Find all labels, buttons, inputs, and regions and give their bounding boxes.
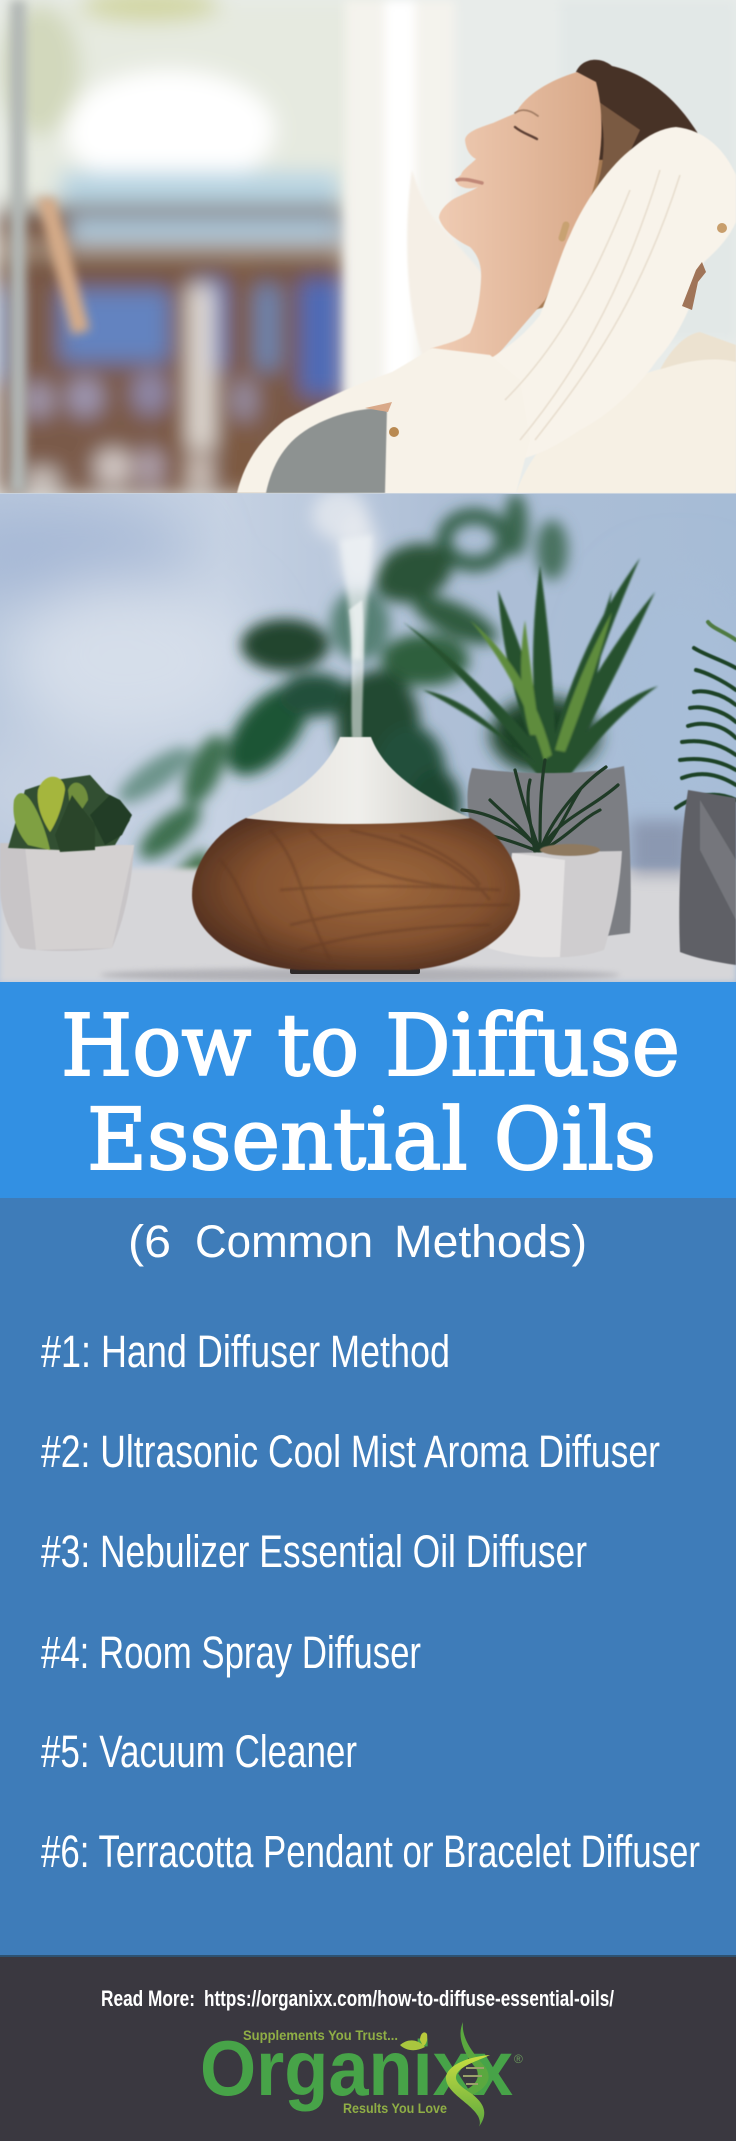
read more link text: https://organixx.com/how-to-diffuse-essential-oils/ (204, 1986, 614, 2011)
method list: #5: Vacuum Cleaner (41, 1726, 357, 1777)
diffuser wood base (192, 818, 520, 970)
small spiky plant (462, 760, 618, 852)
woman: hair (533, 60, 700, 310)
footer (0, 1955, 736, 2141)
left succulent (8, 775, 132, 852)
panel: methods (0, 1198, 736, 1955)
spiky plant behind (403, 558, 658, 782)
method list: #3: Nebulizer Essential Oil Diffuser (41, 1526, 587, 1577)
wood grain (234, 830, 506, 946)
title: How to Diffuse (61, 997, 680, 1096)
title band (0, 982, 736, 1198)
table (0, 820, 736, 982)
woman: face and neck (430, 72, 602, 358)
woman: raised far sleeve (406, 173, 481, 346)
diffuser feet (290, 968, 420, 974)
right plant (676, 622, 736, 808)
mist (312, 489, 378, 738)
seam between photos (0, 490, 736, 496)
title (61, 997, 680, 1190)
diffuser (192, 737, 520, 974)
logo registered mark: ® (514, 2052, 523, 2066)
woman: grey top (266, 408, 387, 493)
logo wordmark: Organixx (200, 2024, 513, 2112)
white pot right (488, 844, 622, 957)
grey pot behind (467, 766, 631, 936)
blurred balcony background (0, 0, 380, 495)
logo tagline top: Supplements You Trust... (243, 2028, 398, 2043)
read more link text: Read More: (101, 1986, 195, 2011)
woman: shirt body (237, 348, 530, 493)
subtitle: (6 (128, 1216, 171, 1267)
woman: sleeve folds (505, 170, 680, 440)
subtitle: Common (195, 1216, 373, 1267)
blurred background plant (111, 494, 578, 872)
method list (41, 1326, 700, 1877)
woman: facial details (457, 110, 566, 238)
blurred sky tones (0, 499, 245, 822)
logo leaf (400, 2032, 427, 2050)
logo tagline bottom: Results You Love (343, 2101, 447, 2116)
diffuser white cap (246, 737, 470, 824)
blurred chair, frame and curtain (5, 0, 452, 493)
logo (200, 2022, 523, 2128)
dark pot right (679, 790, 736, 965)
logo DNA helix (446, 2022, 490, 2128)
read more link text (101, 1986, 614, 2011)
woman: buttons and fingers (365, 223, 727, 437)
title: Essential Oils (87, 1091, 656, 1190)
subtitle (128, 1216, 587, 1267)
left pot (0, 843, 134, 951)
method list: #1: Hand Diffuser Method (41, 1326, 450, 1377)
subtitle: Methods) (394, 1216, 587, 1267)
woman: raised arm sleeve (480, 127, 736, 462)
photo: woman relaxing (0, 0, 736, 495)
couch (516, 332, 736, 493)
method list: #4: Room Spray Diffuser (41, 1627, 421, 1678)
photo: diffuser and plants (0, 489, 736, 982)
